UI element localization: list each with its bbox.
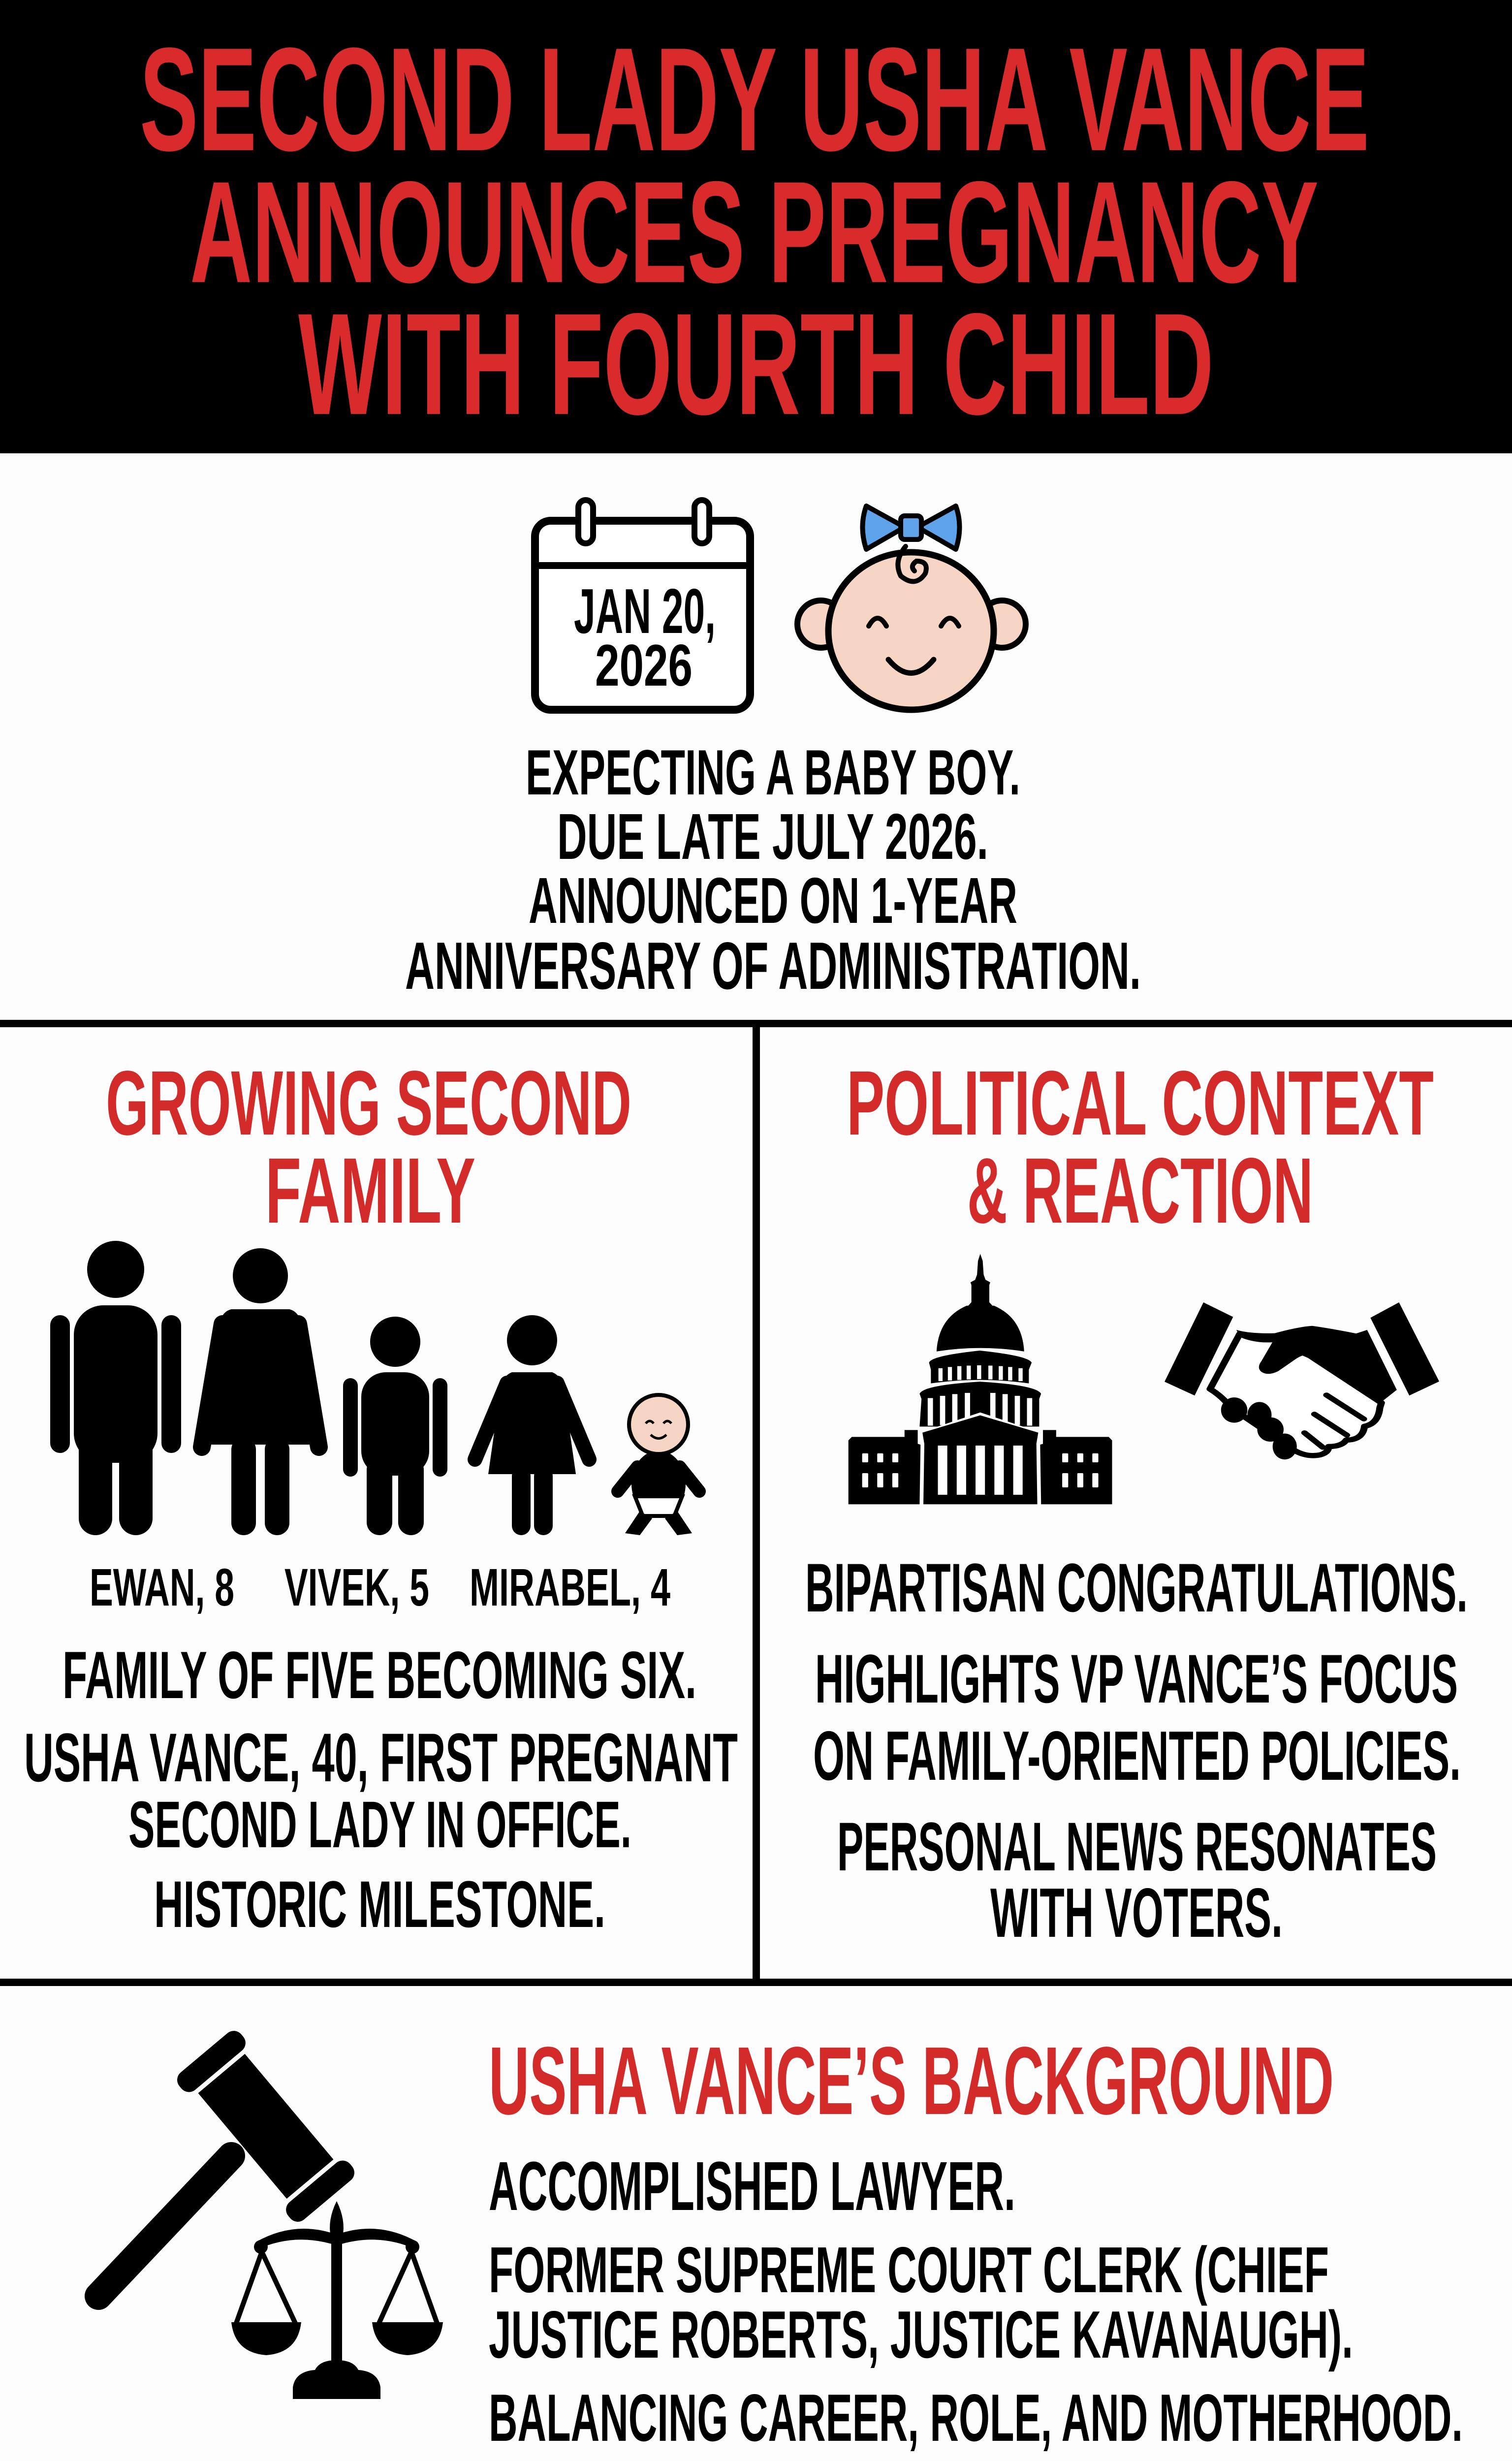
text: background facts: ACCOMPLISHED LAWYER. — [489, 2147, 1015, 2225]
text: political context facts — [805, 1549, 1468, 1952]
title — [140, 17, 1369, 445]
heading: growing second family: GROWING SECOND — [106, 1052, 631, 1154]
icon: handshake — [1165, 1302, 1439, 1459]
text: family facts — [24, 1638, 738, 1941]
text: family facts: USHA VANCE, 40, FIRST PREGNANT — [24, 1719, 738, 1796]
text: announcement details — [405, 736, 1141, 1003]
text: family facts: SECOND LADY IN OFFICE. — [128, 1788, 631, 1862]
icon: capitol building — [849, 1254, 1112, 1506]
text: political context facts: WITH VOTERS. — [990, 1874, 1283, 1952]
labels: children names: MIRABEL, 4 — [470, 1557, 670, 1617]
icon: calendar: JAN 20, — [574, 576, 716, 647]
text: announcement details: EXPECTING A BABY BOY. — [526, 736, 1020, 808]
panel: political context — [805, 1052, 1468, 1952]
text: family facts: HISTORIC MILESTONE. — [154, 1868, 605, 1941]
panel: announcement — [405, 500, 1141, 1003]
text: background facts — [489, 2147, 1463, 2455]
icon: scales of justice — [231, 2201, 443, 2399]
panel: growing second family — [24, 1052, 738, 1941]
icon: family figures — [50, 1241, 699, 1535]
panel: background — [98, 2027, 1463, 2455]
heading: political context & reaction — [847, 1052, 1434, 1243]
icon: baby face with bow — [797, 506, 1026, 710]
labels: children names: VIVEK, 5 — [284, 1557, 429, 1617]
header band — [0, 0, 1512, 453]
labels: children names — [90, 1557, 670, 1617]
text: family facts: FAMILY OF FIVE BECOMING SIX. — [63, 1638, 696, 1712]
text: announcement details: ANNOUNCED ON 1-YEAR — [529, 864, 1017, 937]
labels: children names: EWAN, 8 — [90, 1557, 234, 1617]
icon: calendar: 2026 — [595, 632, 693, 698]
heading: growing second family — [106, 1052, 631, 1243]
icon: calendar — [535, 500, 750, 710]
icon: gavel — [98, 2027, 358, 2296]
heading: growing second family: FAMILY — [265, 1139, 475, 1243]
text: announcement details: DUE LATE JULY 2026. — [557, 800, 988, 873]
